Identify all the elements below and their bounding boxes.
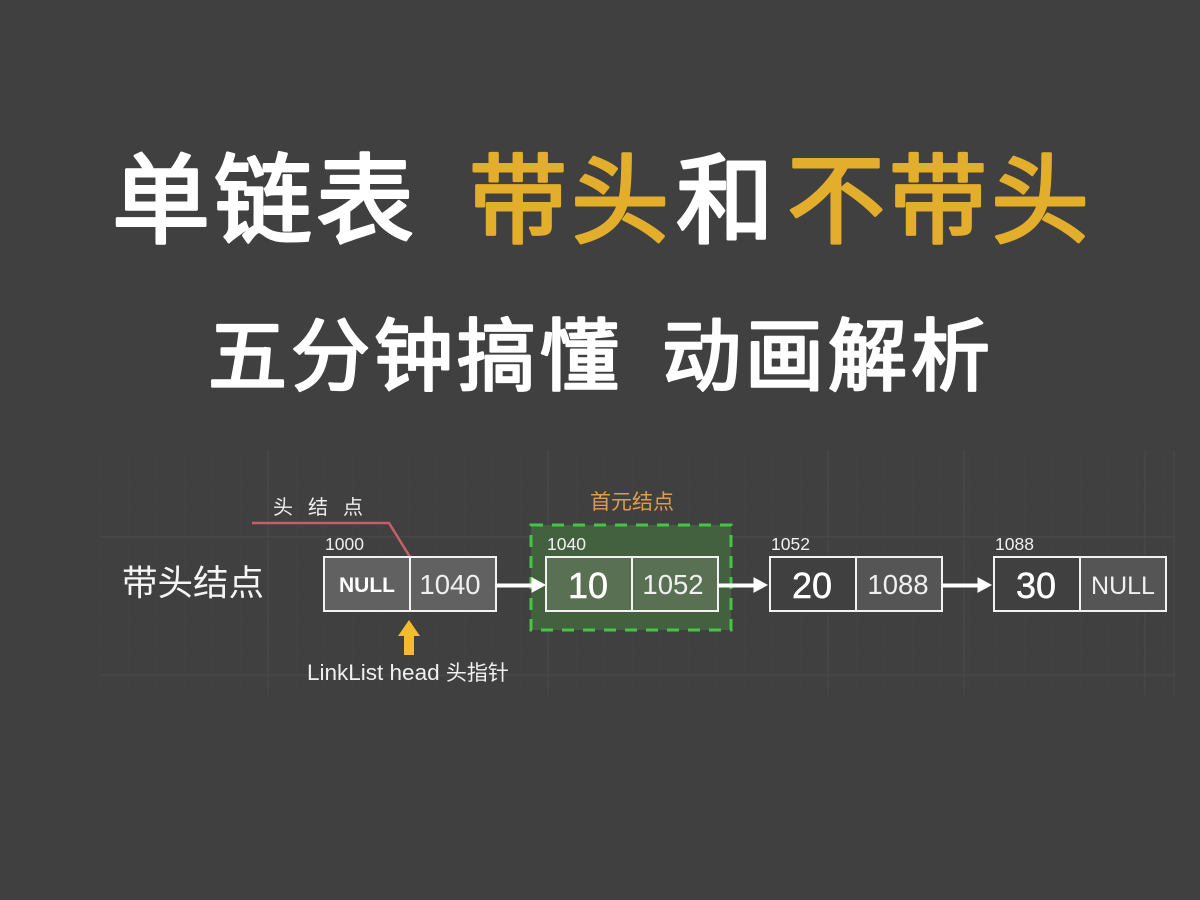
node 10: 1052 <box>642 569 704 600</box>
node 30: 1088 <box>995 534 1034 554</box>
first element highlight: 首元结点 <box>590 486 674 516</box>
head node callout <box>252 491 410 557</box>
node 20: 1052 <box>771 534 810 554</box>
row label: 带头结点 <box>122 555 264 606</box>
node 20: 20 <box>792 565 832 606</box>
node 10: 10 <box>568 565 608 606</box>
title <box>112 122 1093 264</box>
node 30: NULL <box>1091 572 1155 600</box>
node 20 <box>770 534 942 611</box>
title: 不带头 <box>787 122 1093 264</box>
head node: 1000 <box>325 534 364 554</box>
node 10: 1040 <box>547 534 586 554</box>
head node: NULL <box>339 574 395 597</box>
first element highlight <box>531 486 731 630</box>
icon: yellow up arrow <box>398 620 420 655</box>
subtitle: 动画解析 <box>662 292 994 407</box>
node 30: 30 <box>1016 565 1056 606</box>
head node: 1040 <box>419 569 481 600</box>
head pointer label: LinkList head 头指针 <box>307 657 509 687</box>
title: 带头 <box>469 122 673 264</box>
arrow: 20 to 30 <box>942 578 991 592</box>
title: 和 <box>676 122 778 264</box>
title: 单链表 <box>112 122 418 264</box>
subtitle: 五分钟搞懂 <box>208 292 623 407</box>
arrow: 10 to 20 <box>718 578 767 592</box>
head node <box>324 534 496 611</box>
arrow: head to first <box>496 578 545 592</box>
node 30 <box>994 534 1166 611</box>
head node callout: 头结点 <box>273 491 378 520</box>
node 20: 1088 <box>867 569 929 600</box>
node 10 <box>546 534 718 611</box>
subtitle <box>208 292 994 407</box>
